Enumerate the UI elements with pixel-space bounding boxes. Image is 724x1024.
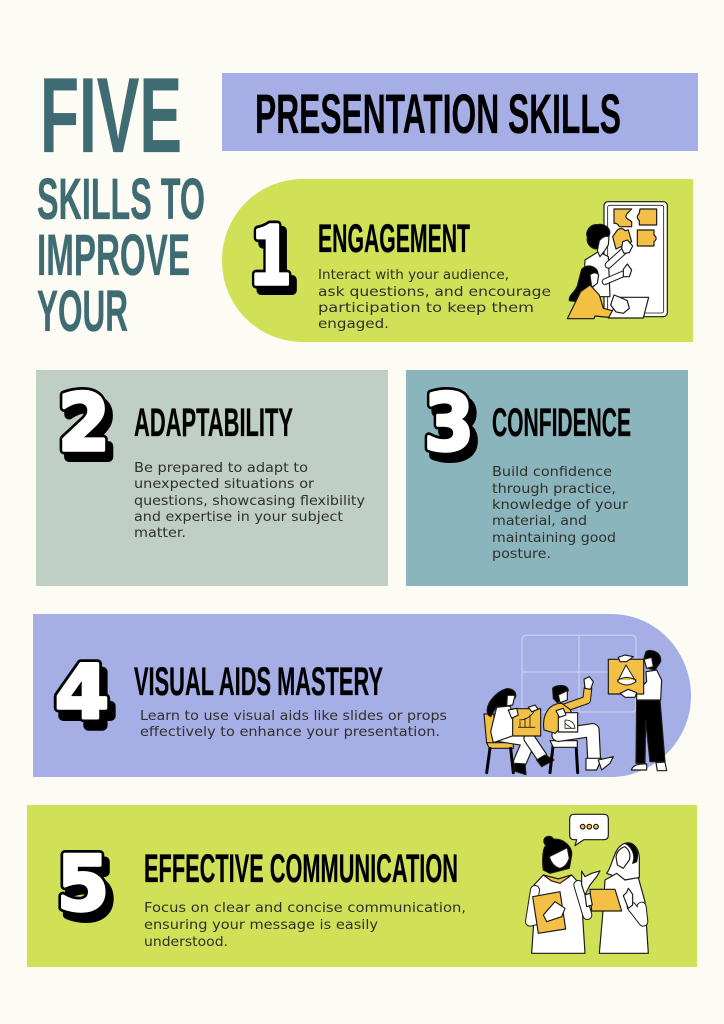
- heading: visual aids mastery: VISUAL AIDS MASTERY: [134, 660, 383, 704]
- panel 5: effective communication: [27, 805, 697, 967]
- seated man: [550, 743, 578, 773]
- number 5: 5: [57, 839, 109, 928]
- right woman: [607, 843, 639, 880]
- number 5: 5: [57, 839, 109, 928]
- panel 3: confidence: [406, 370, 688, 586]
- title: five skills to improve your: IMPROVE: [37, 223, 190, 288]
- text: adaptability description: questions, showcasing flexibility: [134, 493, 365, 509]
- seated woman: [484, 714, 494, 743]
- panel 2: adaptability: [36, 370, 388, 586]
- text: effective communication description: [144, 900, 466, 950]
- text: confidence description: posture.: [492, 546, 551, 562]
- panel 4: visual aids mastery: [33, 614, 691, 777]
- text: visual aids description: Learn to use visual aids like slides or props: [140, 708, 447, 724]
- text: effective communication description: ensuring your message is easily: [144, 917, 378, 933]
- number 2: 2: [63, 386, 115, 476]
- icon: two people arranging puzzle notes on a board: [567, 202, 667, 319]
- text: effective communication description: understood.: [144, 934, 228, 950]
- text: engagement description: ask questions, and encourage: [318, 284, 551, 300]
- text: engagement description: participation to keep them: [318, 300, 534, 316]
- icon: two women talking with tablets and a speech bubble: [530, 814, 648, 953]
- heading: engagement: ENGAGEMENT: [318, 217, 470, 261]
- text: adaptability description: matter.: [134, 525, 186, 541]
- number 5: 5: [62, 846, 114, 935]
- text: confidence description: [492, 464, 628, 562]
- text: effective communication description: Focus on clear and concise communication,: [144, 900, 466, 916]
- text: confidence description: knowledge of your: [492, 497, 628, 513]
- text: confidence description: maintaining good: [492, 530, 616, 546]
- text: visual aids description: effectively to enhance your presentation.: [140, 724, 440, 740]
- standing man: [636, 700, 665, 763]
- text: adaptability description: unexpected situations or: [134, 476, 314, 492]
- text: confidence description: through practice,: [492, 481, 616, 497]
- text: confidence description: material, and: [492, 513, 587, 529]
- number 2: 2: [58, 379, 110, 469]
- text: visual aids description: [140, 708, 447, 740]
- text: confidence description: Build confidence: [492, 464, 612, 480]
- number 4: 4: [55, 650, 109, 736]
- number 3: 3: [424, 379, 474, 469]
- title: five skills to improve your: SKILLS TO: [37, 167, 205, 232]
- number 4: 4: [60, 658, 114, 744]
- number 1: 1: [250, 189, 292, 308]
- text: adaptability description: and expertise in your subject: [134, 509, 343, 525]
- number 3: 3: [429, 386, 479, 476]
- number 1: 1: [250, 189, 292, 308]
- heading: effective communication: EFFECTIVE COMMUNICATION: [144, 847, 458, 891]
- panel 1: engagement: [222, 179, 693, 342]
- title: five skills to improve your: YOUR: [37, 279, 128, 344]
- text: engagement description: [318, 267, 551, 332]
- number 4: 4: [55, 650, 109, 736]
- title: five skills to improve your: [37, 55, 205, 344]
- text: engagement description: engaged.: [318, 316, 389, 332]
- number 1: 1: [255, 195, 297, 314]
- left woman: [543, 836, 572, 873]
- icon: three people presenting charts in front of a window grid: [484, 635, 667, 775]
- heading: adaptability: ADAPTABILITY: [134, 401, 293, 445]
- text: adaptability description: [134, 460, 365, 541]
- number 3: 3: [424, 379, 474, 469]
- number 2: 2: [58, 379, 110, 469]
- title: five skills to improve your: FIVE: [40, 55, 182, 175]
- text: adaptability description: Be prepared to adapt to: [134, 460, 308, 476]
- text: engagement description: Interact with your audience,: [318, 267, 509, 283]
